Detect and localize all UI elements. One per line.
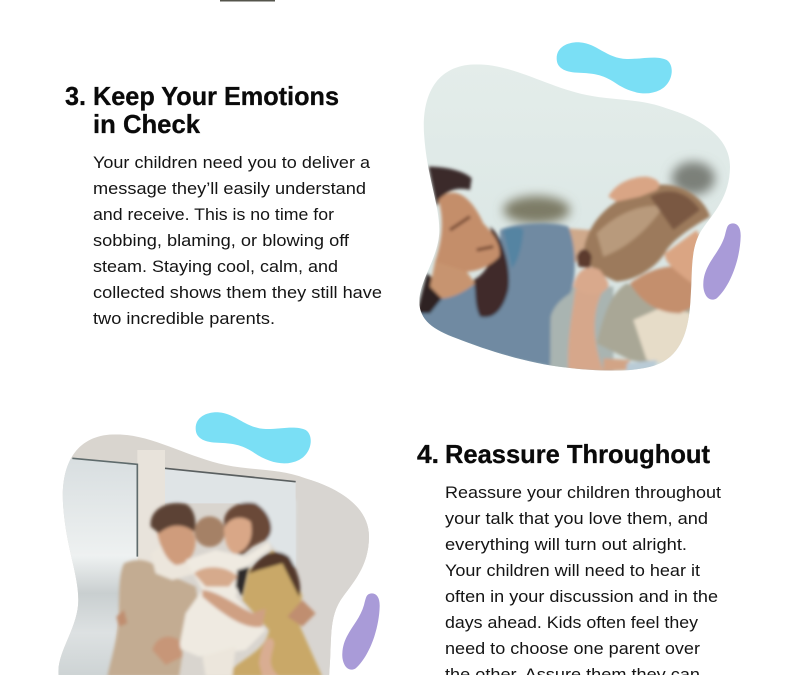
windows	[56, 457, 138, 675]
photo blob: mother comforting son	[413, 42, 741, 377]
child's dress	[179, 542, 271, 657]
text block: step 3 body: collected shows them they still have	[93, 283, 382, 302]
decoration: cyan blob	[196, 412, 311, 463]
heading: step 3	[65, 81, 339, 139]
text block: step 3 body: sobbing, blaming, or blowing off	[93, 231, 349, 250]
heading: step 3: Keep Your Emotions	[93, 81, 339, 111]
text block: step 3 body: and receive. This is no time for	[93, 205, 334, 224]
photo blob: family hugging	[52, 412, 380, 675]
text block: step 4 body: Your children will need to hear it	[445, 561, 700, 580]
text block: step 3 body: Your children need you to deliver a	[93, 153, 371, 172]
text block: step 4 body: often in your discussion and in the	[445, 587, 718, 606]
text block: step 3 body: message they’ll easily understand	[93, 179, 366, 198]
decoration: purple blob	[342, 593, 380, 670]
photo: mother and son	[413, 60, 737, 377]
mother's hair	[428, 167, 472, 207]
text block: step 4 body: Reassure your children throughout	[445, 483, 721, 502]
photo: family	[52, 430, 376, 675]
hands	[608, 177, 659, 202]
father's head	[157, 516, 196, 565]
mother's face	[435, 193, 500, 272]
text block: step 3 body: steam. Staying cool, calm, and	[93, 257, 338, 276]
mother's shirt	[420, 223, 575, 367]
text block: step 4 body	[445, 483, 721, 675]
son's face	[630, 266, 693, 313]
heading: step 3: in Check	[93, 109, 201, 139]
text block: step 4 body: days ahead. Kids often feel they	[445, 613, 699, 632]
child's head	[194, 516, 225, 547]
text block: step 4 body: need to choose one parent over	[445, 639, 700, 658]
text block: step 3 body	[93, 153, 382, 328]
heading: step 3: 3.	[65, 81, 86, 111]
heading: step 4: Reassure Throughout	[445, 439, 710, 469]
text block: step 3 body: two incredible parents.	[93, 309, 275, 328]
mother's hair and face	[224, 502, 271, 555]
text block: step 4 body: your talk that you love them, and	[445, 509, 708, 528]
previous section photo edge	[220, 0, 275, 2]
text block: step 4 body: everything will turn out alright.	[445, 535, 687, 554]
decoration: cyan blob	[557, 42, 672, 93]
decoration: purple blob	[703, 223, 741, 300]
girl's dress and hair	[226, 550, 322, 675]
father's sweater	[107, 560, 199, 675]
son's shirt	[597, 283, 693, 363]
arms and hands	[202, 590, 266, 627]
heading: step 4: 4.	[417, 439, 439, 469]
son's arm	[568, 290, 604, 372]
son's hair	[584, 185, 710, 282]
